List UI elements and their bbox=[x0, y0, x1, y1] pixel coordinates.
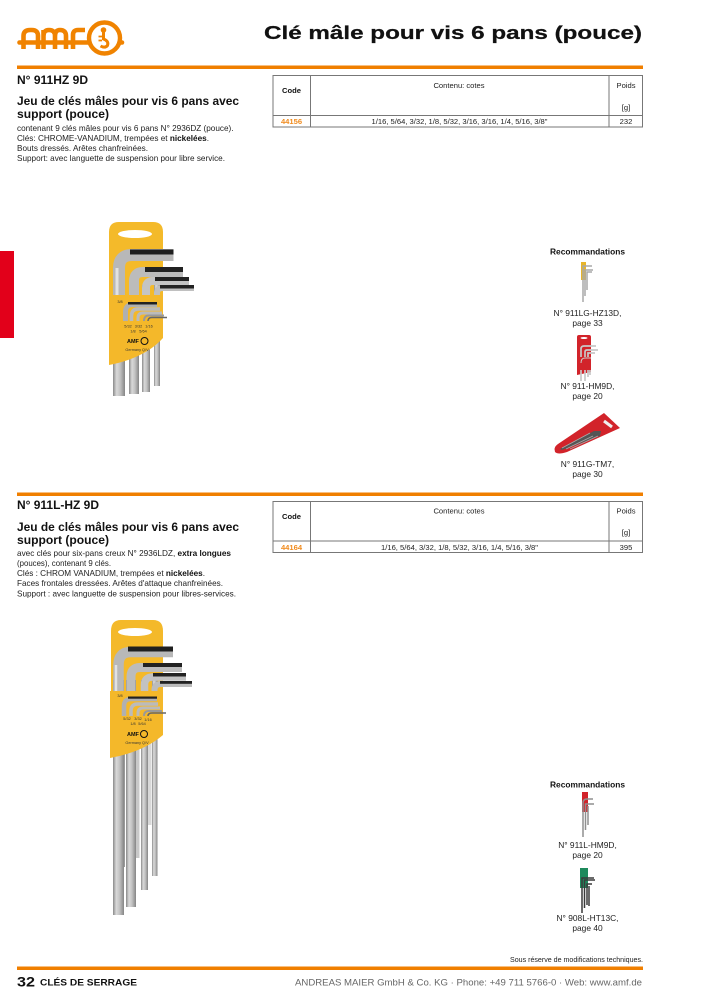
table: 44164: 1/16, 5/64, 3/32, 1/8, 5/32, 3/16, 1/4, 5/16, 3/8" bbox=[381, 543, 538, 552]
card front bbox=[109, 295, 163, 365]
caption: N° 911LG-HZ13D, bbox=[554, 308, 621, 318]
image: hex key set 911L-HZ 9D: Germany Q/V bbox=[125, 741, 149, 745]
table: 44164: [g] bbox=[622, 528, 630, 537]
product description: Clés: CHROME-VANADIUM, trempées et nickelées. bbox=[17, 134, 209, 143]
caption: N° 911G-TM7, bbox=[561, 459, 614, 469]
thumbnail: 908L-HT13C bbox=[580, 868, 595, 913]
table: 44156: 44156 bbox=[281, 117, 302, 126]
table: 44156: 232 bbox=[620, 117, 632, 126]
thumbnail: 911G-TM7 bbox=[554, 413, 620, 454]
logo: amf bbox=[20, 22, 122, 54]
product description: Faces frontales dressées. Arêtes d'attaque chanfreinées. bbox=[17, 579, 223, 588]
recommendations: second block: page 20 bbox=[572, 850, 603, 860]
recommendations heading: Recommandations bbox=[550, 780, 625, 790]
image: hex key set 911HZ 9D: 3/32 bbox=[135, 324, 142, 328]
recommendations: first block: page 33 bbox=[572, 318, 603, 328]
image: hex key set 911HZ 9D: 5/64 bbox=[139, 330, 147, 334]
table: 44164: 44164 bbox=[281, 543, 303, 552]
panel: product 911HZ 9D text bbox=[17, 73, 239, 163]
table: 44164: 395 bbox=[620, 543, 632, 552]
table: 44156: Contenu: cotes bbox=[433, 81, 485, 90]
image: hex key set 911HZ 9D: 1/16 bbox=[145, 324, 153, 328]
image: hex key set 911HZ 9D: 1/8 bbox=[130, 330, 136, 334]
table: 44164: Contenu: cotes bbox=[433, 506, 485, 516]
product description: Clés : CHROM VANADIUM, trempées et nickelées. bbox=[17, 569, 205, 578]
product heading: Jeu de clés mâles pour vis 6 pans avec bbox=[17, 94, 239, 108]
thumbnail: 911LG-HZ13D bbox=[581, 262, 593, 302]
product number: N° 911L-HZ 9D bbox=[17, 498, 99, 512]
image: hex key set 911L-HZ 9D: 5/32 bbox=[123, 717, 131, 721]
disclaimer: Sous réserve de modifications techniques. bbox=[510, 955, 643, 964]
image: hex key set 911HZ 9D: Germany Q/V bbox=[125, 348, 149, 352]
table: 44156: Code bbox=[282, 86, 301, 95]
panel: product 911L-HZ 9D text bbox=[17, 498, 239, 598]
recommendations: first block: page 20 bbox=[572, 391, 603, 401]
product heading: Jeu de clés mâles pour vis 6 pans avec bbox=[17, 520, 239, 534]
image: hex key set 911HZ 9D: AMF bbox=[127, 339, 140, 345]
table: 44164: Code bbox=[282, 512, 301, 521]
product heading bbox=[17, 94, 239, 121]
product description: avec clés pour six-pans creux N° 2936LDZ, extra longues bbox=[17, 549, 231, 558]
table: 44164: Poids bbox=[616, 506, 636, 516]
recommendations: first block: page 30 bbox=[572, 469, 603, 479]
product description bbox=[17, 124, 234, 163]
product description: Support : avec languette de suspension pour libres-services. bbox=[17, 590, 236, 598]
image: hex key set 911L-HZ 9D: 5/64 bbox=[138, 722, 146, 726]
product heading: support (pouce) bbox=[17, 533, 109, 547]
product description bbox=[17, 549, 236, 598]
footer rule bbox=[17, 966, 643, 970]
card front bbox=[110, 691, 163, 758]
caption: N° 911-HM9D, bbox=[561, 381, 614, 391]
caption: N° 908L-HT13C, bbox=[556, 913, 618, 923]
page number: 32 bbox=[17, 974, 35, 990]
table: 44156 bbox=[273, 76, 642, 127]
section rule bbox=[17, 492, 643, 496]
recommendations: second block: page 40 bbox=[572, 923, 603, 933]
product heading: support (pouce) bbox=[17, 107, 109, 121]
image: hex key set 911HZ 9D: 3/8 bbox=[117, 300, 123, 304]
thumbnail: 911-HM9D bbox=[577, 335, 598, 381]
header rule bbox=[17, 66, 643, 69]
table: 44156: Poids bbox=[616, 81, 636, 90]
image: hex key set 911L-HZ 9D: 3/32 bbox=[134, 717, 142, 721]
product heading bbox=[17, 520, 239, 547]
caption: N° 911L-HM9D, bbox=[558, 840, 617, 850]
product description: Support: avec languette de suspension pour libre service. bbox=[17, 154, 225, 163]
image: hex key set 911L-HZ 9D: 1/8 bbox=[130, 722, 136, 726]
product description: contenant 9 clés mâles pour vis 6 pans N° 2936DZ (pouce). bbox=[17, 124, 234, 133]
image: hex key set 911L-HZ 9D bbox=[110, 620, 192, 915]
company contact: ANDREAS MAIER GmbH & Co. KG · Phone: +49 711 5766-0 · Web: www.amf.de bbox=[295, 978, 642, 988]
recommendations: first block bbox=[550, 246, 625, 479]
table: 44164 bbox=[273, 502, 642, 552]
section name: CLÉS DE SERRAGE bbox=[40, 978, 137, 988]
product number: N° 911HZ 9D bbox=[17, 73, 88, 87]
recommendations: second block bbox=[550, 780, 625, 933]
title: Clé mâle pour vis 6 pans (pouce) bbox=[264, 23, 642, 43]
product description: Bouts dressés. Arêtes chanfreinées. bbox=[17, 144, 148, 153]
side tab bbox=[0, 251, 14, 338]
image: hex key set 911L-HZ 9D: 3/8 bbox=[117, 694, 123, 698]
table: 44156: 1/16, 5/64, 3/32, 1/8, 5/32, 3/16, 3/16, 1/4, 5/16, 3/8" bbox=[372, 117, 548, 126]
product description: (pouces), contenant 9 clés. bbox=[17, 559, 111, 568]
image: hex key set 911L-HZ 9D: AMF bbox=[127, 732, 140, 738]
recommendations heading: Recommandations bbox=[550, 246, 625, 256]
thumbnail: 911L-HM9D bbox=[582, 792, 594, 837]
table: 44156: [g] bbox=[622, 103, 630, 112]
image: hex key set 911L-HZ 9D: 1/16 bbox=[144, 718, 152, 722]
image: hex key set 911HZ 9D: 5/32 bbox=[124, 324, 132, 328]
image: hex key set 911HZ 9D bbox=[109, 222, 194, 396]
